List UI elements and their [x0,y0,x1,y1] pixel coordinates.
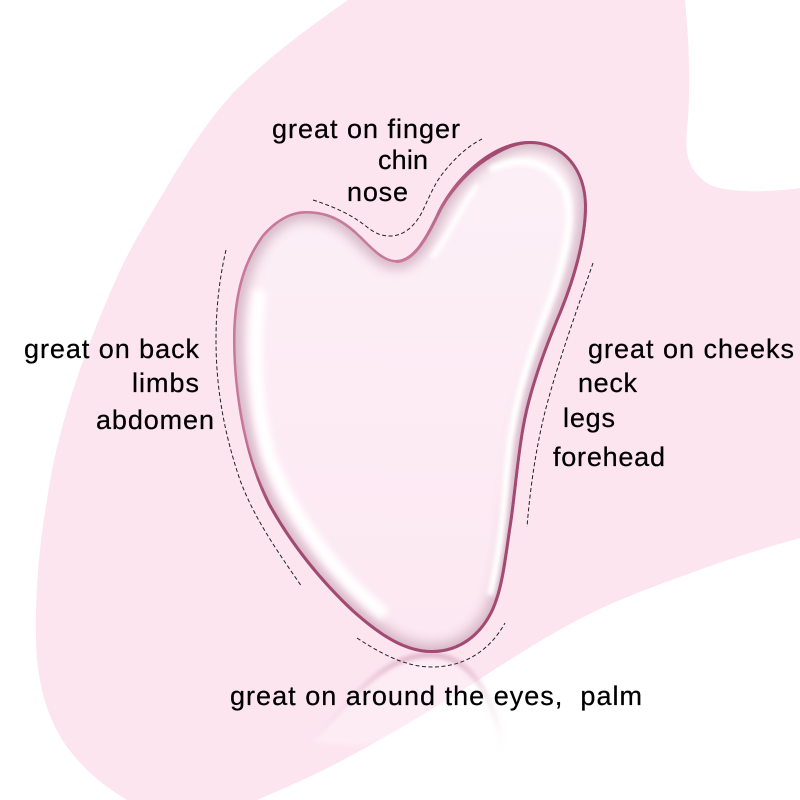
labels: right edge: forehead [553,442,665,472]
labels: top notch [272,114,460,207]
labels: right edge: neck [578,368,638,398]
labels: right edge: great on cheeks [588,334,794,364]
labels: left edge: limbs [132,368,199,398]
dark rim: right side and lower left [268,141,587,653]
rim transition: lower left [236,410,268,505]
labels: top notch: nose [347,177,408,207]
labels: top notch: great on finger [272,114,460,144]
gua sha reflection [313,655,503,770]
labels: top notch: chin [378,145,428,175]
labels: left edge: great on back [24,334,200,364]
labels: left edge [24,334,214,435]
white highlight band: left [256,290,385,615]
thin rim: left and top [233,141,587,653]
rim transition: notch to right lobe [396,155,490,260]
dashed line: bottom tip [357,623,505,667]
dashed line: top notch [313,139,482,236]
gua sha stone [233,141,587,653]
dashed line: left edge [216,250,302,587]
dashed line: right edge [527,263,593,527]
label: bottom tip: great on around the eyes, palm [230,681,642,711]
white highlight band: right [490,162,569,595]
labels: left edge: abdomen [96,405,214,435]
labels: right edge: legs [563,403,615,433]
inner mauve shading [233,141,587,653]
labels: right edge [553,334,794,472]
